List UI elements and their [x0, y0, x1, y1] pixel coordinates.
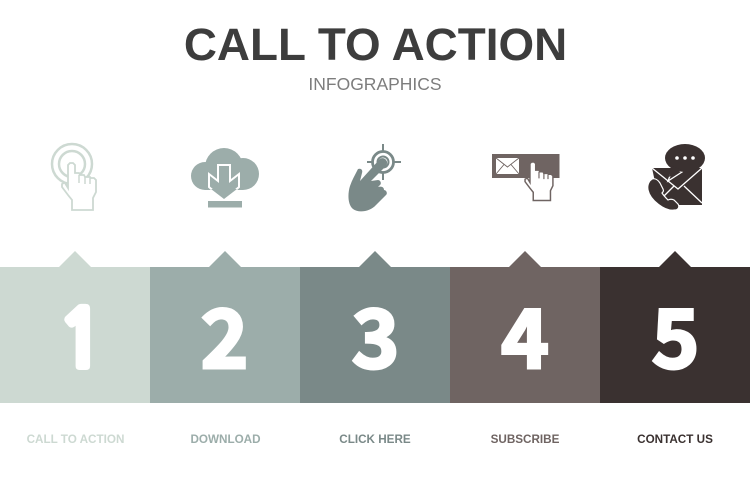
panel: step 4: [450, 251, 600, 403]
panel: step 1: [0, 251, 150, 403]
icon: cloud download: [191, 148, 259, 208]
panel: step 2: [150, 251, 300, 403]
panel: step 2: 2: [201, 275, 248, 392]
label: download: DOWNLOAD: [190, 433, 261, 446]
icon: hand tapping target: [348, 144, 401, 211]
panel: step 3: [300, 251, 450, 403]
label: call to action: CALL TO ACTION: [27, 433, 124, 446]
panel: step 5: [600, 251, 750, 403]
icon: email subscribe button with hand: [492, 154, 560, 200]
panel: step 1: 1: [57, 301, 105, 379]
icon: touch target with pointing hand: [52, 144, 96, 210]
label: subscribe: SUBSCRIBE: [491, 433, 560, 446]
panel: step 4: 4: [501, 275, 549, 392]
subtitle: INFOGRAPHICS: [308, 74, 442, 94]
panel: step 5: 5: [652, 275, 699, 392]
icon: envelope with speech bubble and phone: [648, 144, 705, 210]
panel: step 3: 3: [352, 275, 399, 392]
label: click here: CLICK HERE: [339, 433, 411, 446]
title: CALL TO ACTION: [184, 19, 567, 70]
label: contact us: CONTACT US: [637, 433, 713, 446]
